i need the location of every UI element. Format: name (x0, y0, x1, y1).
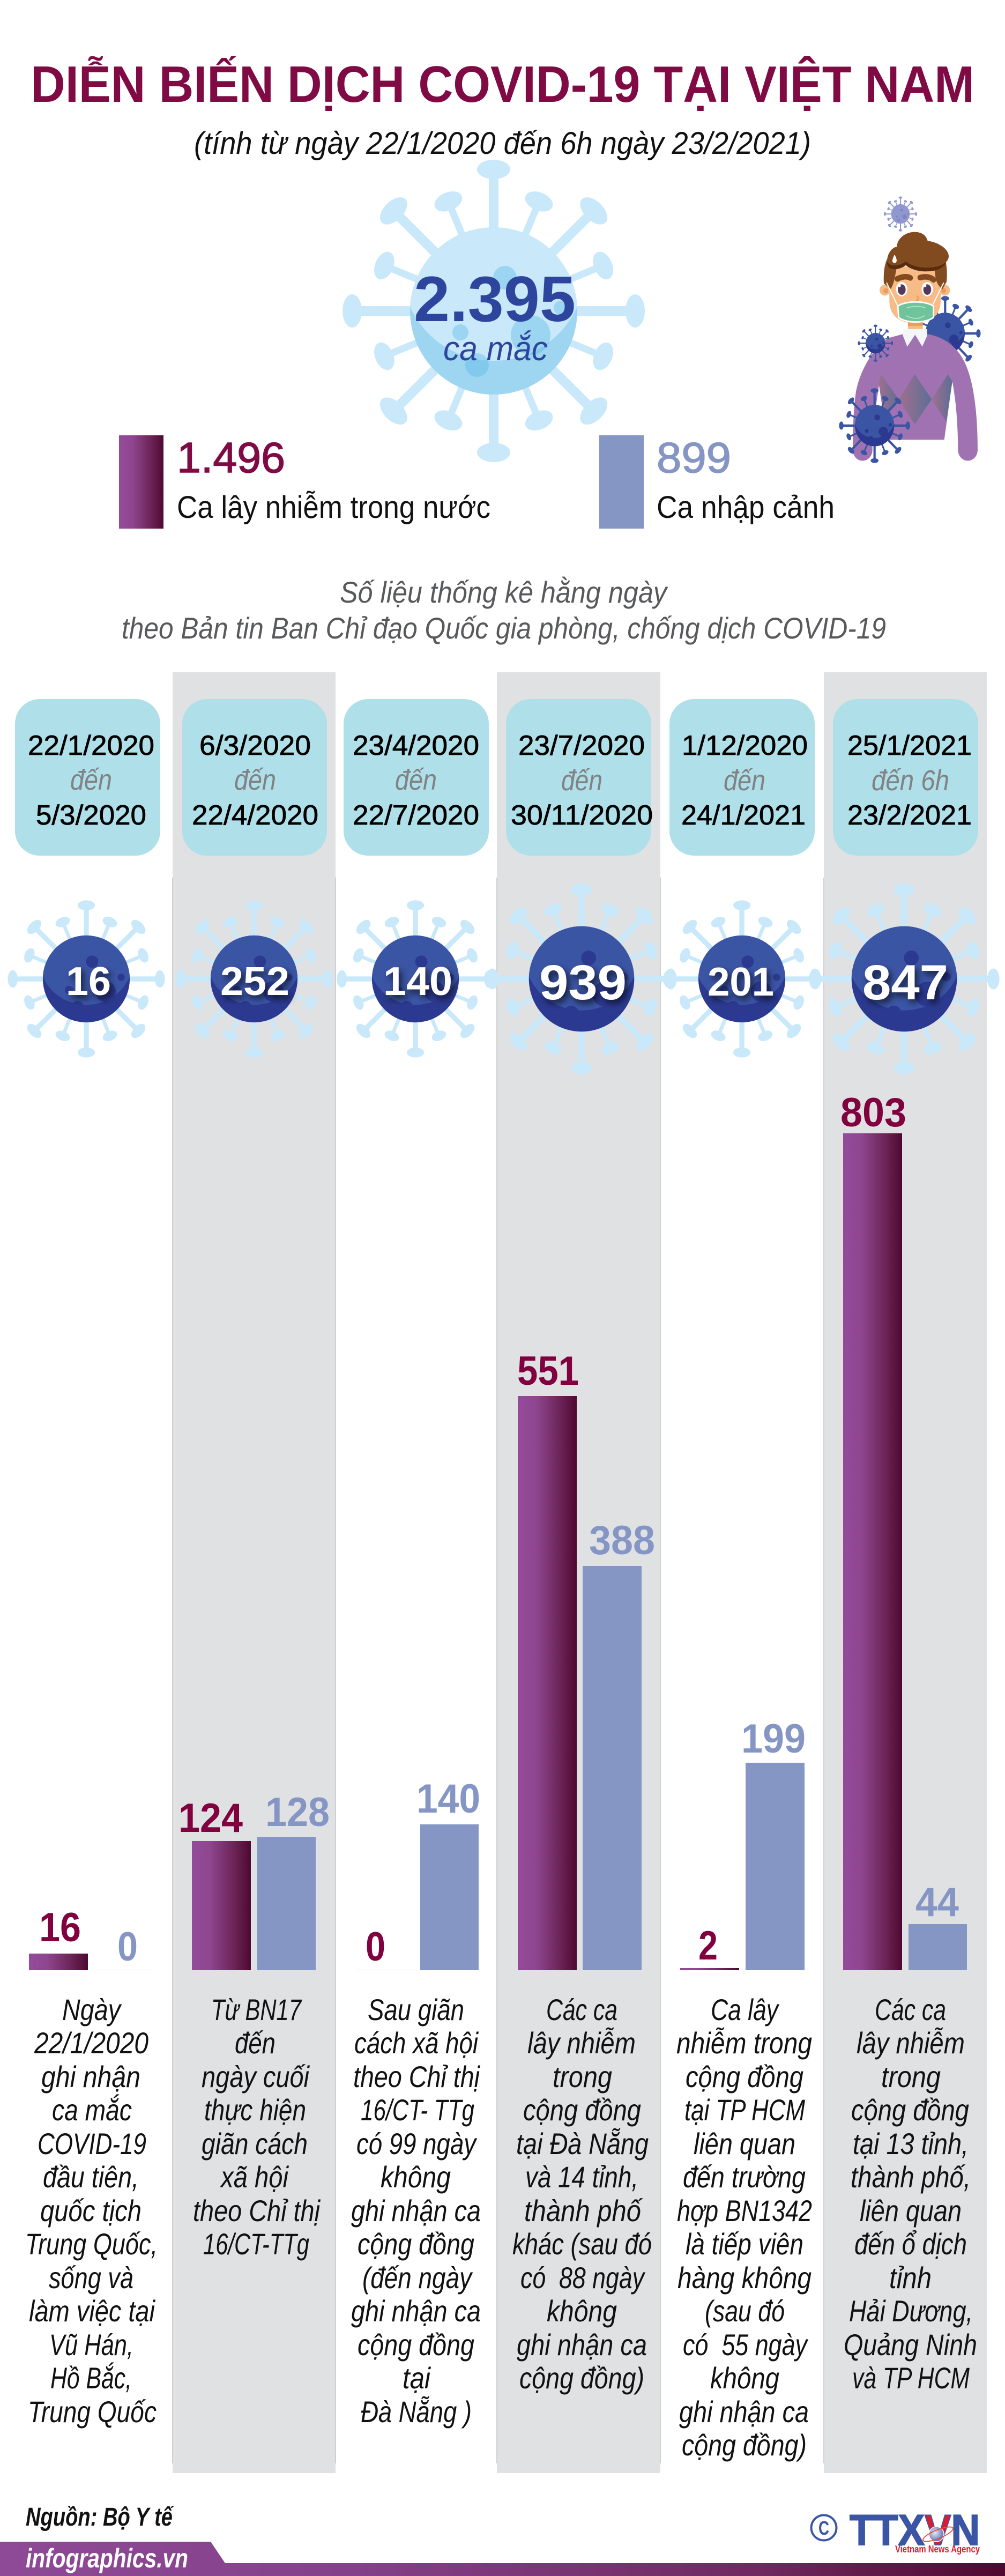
date box 4: đến (561, 764, 602, 797)
date box 6: đến 6h (872, 764, 949, 797)
date box 3: đến (395, 764, 437, 796)
source note: Nguồn: Bộ Y tế (26, 2503, 174, 2532)
date box 3 (344, 699, 489, 856)
date box 1: 22/1/2020 (28, 730, 154, 761)
description: ghi nhận ca (351, 2294, 481, 2328)
description: đầu tiên, (43, 2160, 139, 2194)
description: và 14 tỉnh, (525, 2160, 638, 2194)
description: Hồ Bắc, (50, 2361, 132, 2395)
description: đến (235, 2026, 276, 2060)
bars (178, 1790, 330, 1970)
virus total 252: 252 (220, 959, 289, 1004)
description: cộng đồng (358, 2227, 474, 2261)
date box 1 (15, 699, 160, 856)
description: Ngày (62, 1993, 122, 2026)
description: ghi nhận ca (351, 2194, 481, 2228)
column 3: 23/4/2020 - 22/7/2020 (337, 699, 494, 2429)
description: cộng đồng (358, 2328, 474, 2362)
bars: 199 (741, 1716, 806, 1762)
description: nhiễm trong (676, 2026, 812, 2060)
bars (355, 1776, 480, 1970)
description: liên quan (694, 2127, 795, 2161)
description: không (710, 2361, 779, 2395)
description (25, 1993, 158, 2429)
description (844, 1993, 977, 2395)
legend: domestic cases: 1.496 (177, 434, 285, 481)
subtitle: (tính từ ngày 22/1/2020 đến 6h ngày 23/2/2021) (194, 126, 811, 161)
bars (840, 1090, 967, 1970)
date box 4: 23/7/2020 (518, 730, 645, 761)
date box 5 (669, 699, 815, 856)
data source note: Số liệu thống kê hằng ngày (340, 575, 668, 609)
description: giãn cách (202, 2127, 308, 2161)
legend: domestic cases: Ca lây nhiễm trong nước (177, 490, 490, 525)
data source note (122, 575, 886, 645)
main virus with total cases (343, 160, 645, 462)
description: Trung Quốc (28, 2395, 157, 2429)
bars: 124 (178, 1795, 243, 1841)
date box 2: đến (234, 764, 276, 796)
description: có 88 ngày (520, 2261, 645, 2295)
description: trong (881, 2060, 941, 2094)
virus total 939 (486, 884, 677, 1074)
description: khác (sau đó (512, 2227, 652, 2261)
column 5: 1/12/2020 - 24/1/2021 (663, 699, 821, 2462)
description: Vũ Hán, (49, 2328, 133, 2362)
date box 6 (833, 699, 978, 856)
description (193, 1993, 321, 2261)
copyright logo (812, 2515, 836, 2540)
date box 1: 5/3/2020 (36, 800, 146, 831)
description: ghi nhận ca (517, 2328, 647, 2362)
column 4: 23/7/2020 - 30/11/2020 (486, 699, 677, 2395)
date box 5: 24/1/2021 (681, 800, 806, 831)
column 2: 6/3/2020 - 22/4/2020 (175, 699, 333, 2261)
virus total 16: 16 (66, 959, 111, 1004)
description: cộng đồng (686, 2060, 803, 2094)
date box 4: 30/11/2020 (511, 800, 653, 831)
description: 22/1/2020 (34, 2026, 148, 2060)
description: trong (553, 2060, 612, 2094)
date box 6: 23/2/2021 (847, 800, 972, 831)
legend: imported cases: 899 (657, 434, 731, 481)
bars (680, 1716, 806, 1970)
footer band: infographics.vn (26, 2543, 188, 2573)
description: hợp BN1342 (677, 2194, 812, 2228)
description: ghi nhận (41, 2060, 140, 2094)
date box 3: 22/7/2020 (353, 800, 479, 831)
description: (sau đó (705, 2294, 785, 2328)
description: 16/CT- TTg (361, 2093, 474, 2127)
description: Từ BN17 (211, 1993, 302, 2026)
description: sống và (49, 2261, 133, 2295)
description (351, 1993, 481, 2429)
date box 5: 1/12/2020 (682, 730, 808, 761)
copyright logo: C (818, 2517, 829, 2539)
description: Hải Dương, (849, 2294, 973, 2328)
virus total 847: 847 (862, 955, 948, 1010)
date box 2: 6/3/2020 (199, 730, 311, 761)
description: làm việc tại (29, 2294, 155, 2328)
date box 6: 25/1/2021 (847, 730, 972, 761)
description: Trung Quốc, (25, 2227, 158, 2261)
description: cộng đồng (851, 2093, 969, 2127)
description: có 55 ngày (683, 2328, 808, 2362)
bars: 44 (915, 1880, 959, 1925)
bars (517, 1348, 655, 1970)
description: tại 13 tỉnh, (853, 2127, 969, 2161)
bars: 140 (416, 1776, 480, 1822)
TTXVN logo: TTXVN (850, 2506, 980, 2555)
virus total 201: 201 (708, 959, 774, 1004)
bars: 128 (265, 1790, 330, 1835)
bars (29, 1905, 153, 1970)
description: đến trường (683, 2160, 806, 2194)
bars: 388 (589, 1518, 655, 1563)
description: (đến ngày (362, 2261, 473, 2295)
date box 4 (506, 699, 653, 856)
description: tại Đà Nẵng (516, 2127, 649, 2161)
description: cách xã hội (354, 2026, 479, 2060)
virus total 201 (663, 900, 821, 1058)
description: COVID-19 (38, 2127, 146, 2161)
TTXVN logo: Vietnam News Agency (895, 2544, 980, 2555)
legend: imported cases (599, 434, 835, 529)
column 1: 22/1/2020 - 5/3/2020 (8, 699, 165, 2429)
description: cộng đồng) (519, 2361, 644, 2395)
description: quốc tịch (40, 2194, 142, 2228)
virus total 939: 939 (539, 955, 627, 1010)
bars: 2 (698, 1923, 718, 1969)
date box 1: đến (70, 764, 112, 796)
description: tỉnh (889, 2261, 932, 2295)
date box 2 (182, 699, 327, 856)
description: thực hiện (204, 2093, 306, 2127)
virus total 140 (337, 900, 494, 1058)
date box 5: đến (724, 764, 765, 797)
bars: 0 (117, 1924, 138, 1970)
description: tại TP HCM (684, 2093, 805, 2127)
virus total 140: 140 (383, 959, 452, 1004)
description: cộng đồng) (682, 2428, 807, 2462)
description: không (547, 2294, 617, 2328)
description: ca mắc (52, 2093, 132, 2127)
column 6: 25/1/2021 - 23/2/2021 (809, 699, 1000, 2395)
virus total 847 (809, 884, 1000, 1074)
description: lây nhiễm (527, 2026, 636, 2060)
description: Ca lây (711, 1993, 779, 2026)
main virus with total cases: ca mắc (443, 329, 548, 368)
description: đến ổ dịch (854, 2227, 967, 2261)
description: thành phố (524, 2194, 643, 2228)
description: tại (403, 2361, 431, 2395)
main virus with total cases: 2.395 (414, 263, 576, 335)
bars: 803 (840, 1090, 906, 1135)
description: xã hội (219, 2160, 289, 2194)
description: Các ca (546, 1993, 617, 2026)
description: và TP HCM (852, 2361, 970, 2395)
description: thành phố, (851, 2160, 971, 2194)
description: cộng đồng (523, 2093, 641, 2127)
legend: imported cases: Ca nhập cảnh (657, 490, 835, 525)
data source note: theo Bản tin Ban Chỉ đạo Quốc gia phòng, chống dịch COVID-19 (122, 611, 886, 645)
description: ngày cuối (202, 2060, 310, 2094)
description: là tiếp viên (686, 2227, 803, 2261)
description (676, 1993, 812, 2462)
description: không (381, 2160, 451, 2194)
bars: 0 (366, 1924, 385, 1970)
description: theo Chỉ thị (193, 2194, 321, 2228)
description: có 99 ngày (356, 2127, 477, 2161)
description: liên quan (860, 2194, 962, 2228)
description: Đà Nẵng ) (361, 2395, 472, 2429)
description: Sau giãn (368, 1993, 464, 2026)
description: hàng không (678, 2261, 812, 2295)
bars: 16 (39, 1905, 81, 1950)
description: theo Chỉ thị (353, 2060, 480, 2094)
footer band (0, 2542, 1005, 2576)
virus total 16 (8, 900, 165, 1058)
date box 2: 22/4/2020 (192, 800, 318, 831)
date box 3: 23/4/2020 (353, 730, 479, 761)
bars: 551 (517, 1348, 579, 1394)
description: Các ca (875, 1993, 946, 2026)
description: Quảng Ninh (844, 2328, 977, 2362)
description: lây nhiễm (857, 2026, 965, 2060)
column background strips (173, 672, 987, 2473)
description: ghi nhận ca (679, 2395, 809, 2429)
description (512, 1993, 652, 2395)
description: 16/CT-TTg (203, 2227, 309, 2261)
legend: domestic cases (119, 434, 490, 529)
virus total 252 (175, 900, 333, 1058)
illustration: person with mask and viruses (839, 196, 981, 463)
